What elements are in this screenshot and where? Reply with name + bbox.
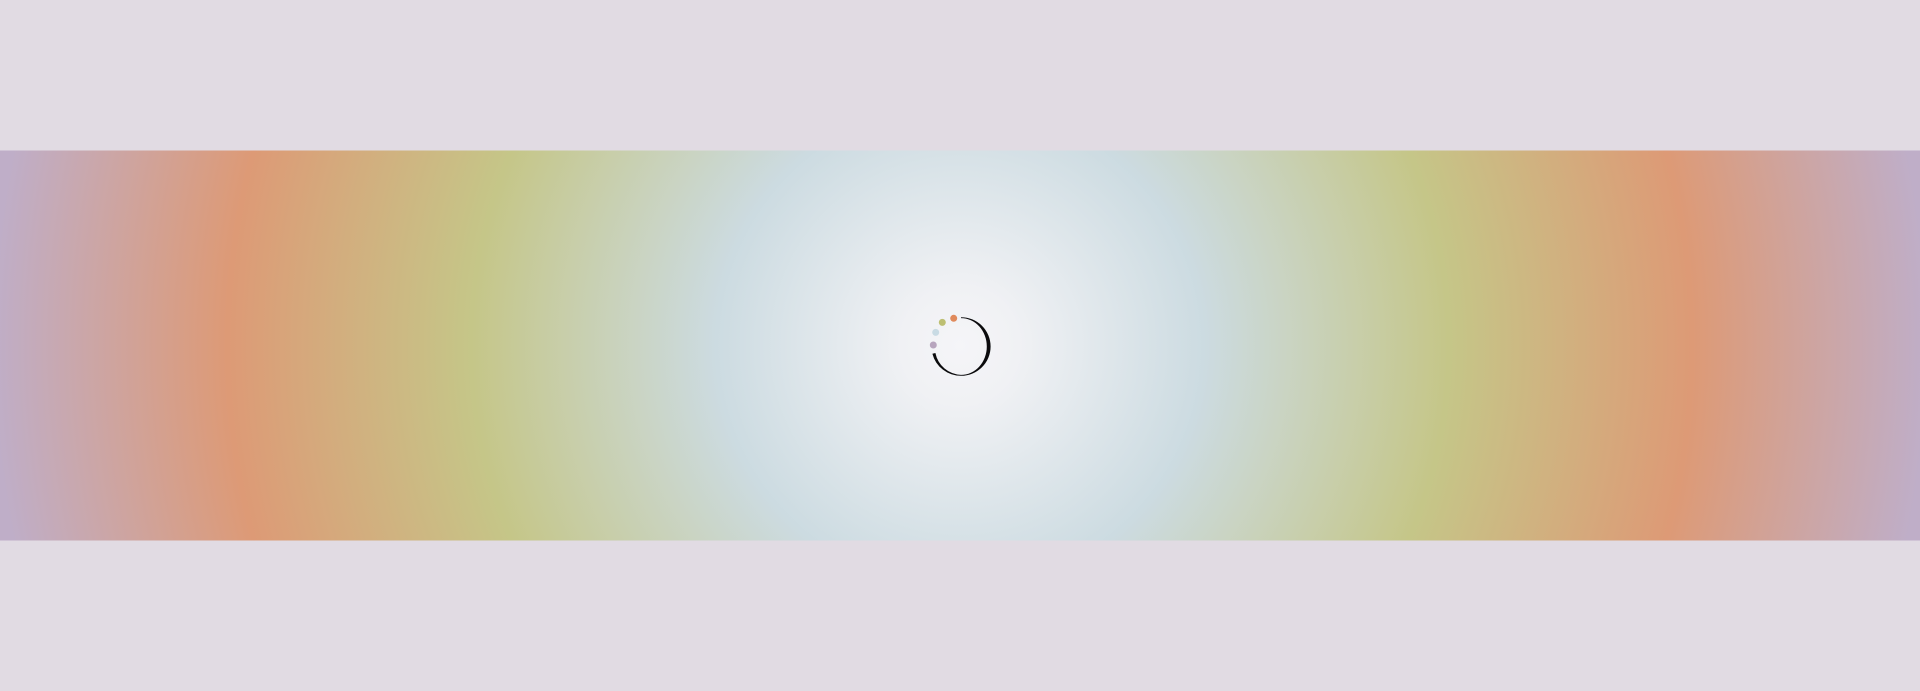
dot: green xyxy=(939,319,946,326)
spinner ring: lower-left crescent xyxy=(932,353,961,376)
panel: radial gradient band xyxy=(0,150,1920,540)
dot: purple xyxy=(930,342,937,348)
dot: orange xyxy=(950,315,957,322)
spinner ring: right crescent xyxy=(961,317,991,376)
icon: loading spinner xyxy=(930,314,991,376)
dot: blue xyxy=(932,329,939,336)
